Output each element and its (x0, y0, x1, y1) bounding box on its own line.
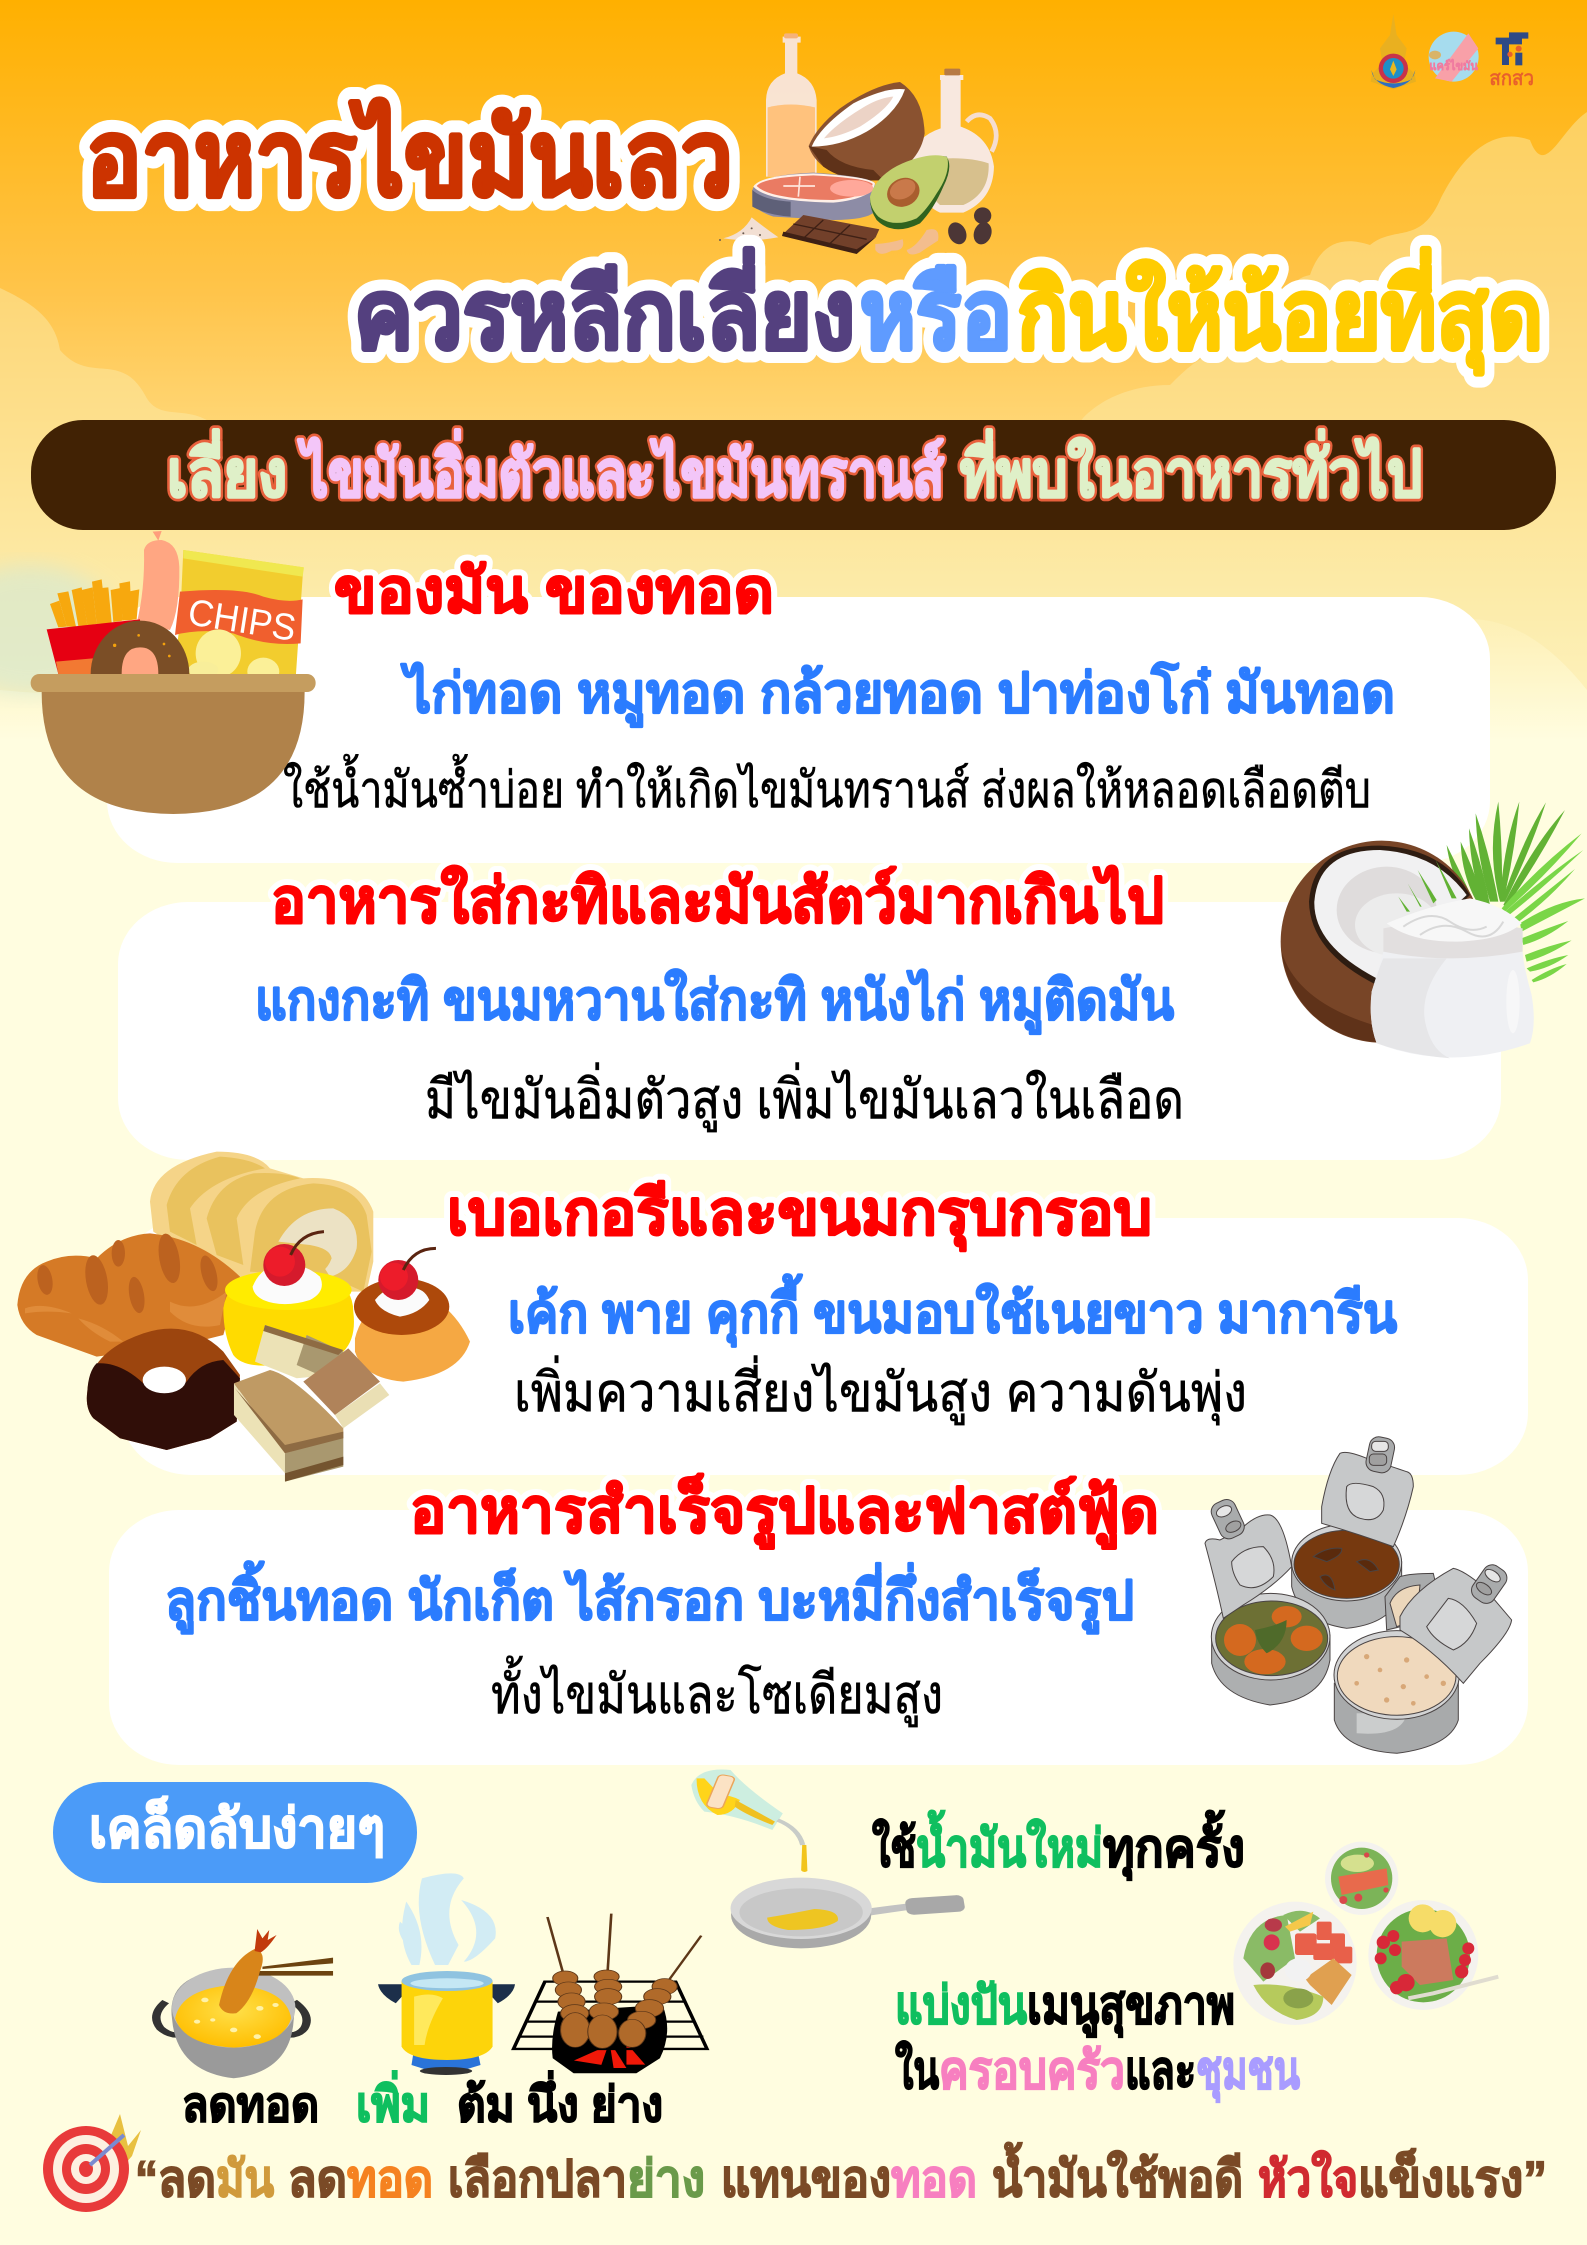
icon: target (43, 2114, 141, 2212)
text: share healthy menus: แบ่งปัน (895, 1977, 1027, 2035)
examples: แกงกะทิ ขนมหวานใส่กะทิ หนังไก่ หมูติดมัน (255, 968, 1174, 1035)
heading: เบอเกอรีและขนมกรุบกรอบ (447, 1179, 1152, 1251)
examples: เค้ก พาย คุกกี้ ขนมอบใช้เนยขาว มาการีน (508, 1274, 1397, 1348)
illustration: fatty foods (719, 33, 996, 254)
logos (1371, 14, 1534, 90)
slogan: แข็งแรง” (1358, 2148, 1547, 2207)
reason: เพิ่มความเสี่ยงไขมันสูง ความดันพุ่ง (514, 1355, 1247, 1426)
logo: circle: แคร์ไขมัน (1429, 58, 1479, 73)
reason: ใช้น้ำมันซ้ำบ่อย ทำให้เกิดไขมันทรานส์ ส่งผลให้หลอดเลือดตีบ (283, 754, 1371, 818)
healthy tip text (872, 1810, 1245, 1881)
slogan: น้ำมันใช้พอดี (992, 2142, 1243, 2207)
logo: emblem (1371, 14, 1416, 89)
title: หรือ (860, 262, 1012, 369)
slogan (135, 2142, 1547, 2207)
icon: boiling pot (378, 1873, 515, 2075)
heading: อาหารใส่กะทิและมันสัตว์มากเกินไป (271, 865, 1164, 936)
banner: ไขมันอิ่มตัวและไขมันทรานส์ (297, 429, 944, 510)
illustration: coconut and cream jar (1281, 802, 1585, 1058)
healthy tip text: ใช้ (872, 1818, 916, 1878)
tips badge (53, 1782, 417, 1883)
icon: oil pouring into pan (691, 1769, 966, 1948)
logo: circle (1429, 32, 1479, 82)
title: อาหารไขมันเลว (86, 98, 733, 218)
heading: เบอเกอรีและขนมกรุบกรอบ (447, 1179, 1152, 1251)
text: share healthy menus: ครอบครัว (939, 2042, 1125, 2100)
illustration: bakery (17, 1152, 470, 1482)
title (86, 98, 1543, 375)
reason: มีไขมันอิ่มตัวสูง เพิ่มไขมันเลวในเลือด (425, 1062, 1184, 1132)
slogan: เลือกปลา (448, 2151, 627, 2207)
panel: bakery and crunchy snacks (121, 1179, 1528, 1475)
panel: ready meals and fast food (109, 1473, 1528, 1765)
title: อาหารไขมันเลว (86, 98, 733, 218)
text: share healthy menus: เมนูสุขภาพ (1027, 1977, 1235, 2038)
logo: TSRI (1489, 32, 1534, 90)
slogan: หัวใจ (1258, 2150, 1358, 2207)
examples: ลูกชิ้นทอด นักเก็ต ไส้กรอก บะหมี่กึ่งสำเร็จรูป (165, 1561, 1134, 1634)
slogan: แทนของ (721, 2151, 891, 2207)
illustration: salads (1233, 1842, 1498, 2025)
banner: ที่พบในอาหารทั่วไป (960, 429, 1422, 510)
logo: TSRI: สกสว (1489, 68, 1534, 90)
icon: grilled skewers (513, 1914, 707, 2073)
slogan: ทอด (347, 2151, 433, 2207)
heading: ของมัน ของทอด (334, 557, 774, 626)
tips badge: เคล็ดลับง่ายๆ (89, 1797, 385, 1859)
text: share healthy menus: ชุมชน (1196, 2042, 1300, 2103)
cooking method labels (182, 2070, 663, 2132)
slogan: ทอด (891, 2151, 977, 2207)
illustration: basket of fried snacks (31, 531, 316, 814)
cooking method labels: ต้ม นึ่ง ย่าง (457, 2070, 663, 2132)
title: ควรหลีกเลี่ยง (354, 247, 855, 369)
healthy tip text: ทุกครั้ง (1103, 1810, 1245, 1881)
banner: เลี่ยง (167, 429, 287, 510)
reason: ทั้งไขมันและโซเดียมสูง (491, 1656, 943, 1727)
heading: อาหารสำเร็จรูปและฟาสต์ฟู้ด (410, 1473, 1159, 1549)
heading: ของมัน ของทอด (334, 557, 774, 626)
heading: อาหารสำเร็จรูปและฟาสต์ฟู้ด (410, 1473, 1159, 1549)
text: share healthy menus: ใน (895, 2040, 939, 2100)
cooking method labels: เพิ่ม (356, 2070, 430, 2132)
examples: ไก่ทอด หมูทอด กล้วยทอด ปาท่องโก๋ มันทอด (400, 661, 1395, 728)
cooking method labels: ลดทอด (182, 2079, 319, 2132)
slogan: มัน (216, 2151, 274, 2207)
title: ควรหลีกเลี่ยง (354, 247, 855, 369)
slogan: ย่าง (627, 2151, 705, 2207)
banner: ไขมันอิ่มตัวและไขมันทรานส์ (297, 429, 944, 510)
slogan: ลด (288, 2151, 347, 2207)
banner (31, 420, 1556, 530)
banner: เลี่ยง (167, 429, 287, 510)
panel: oily fried food (107, 557, 1490, 863)
heading: อาหารใส่กะทิและมันสัตว์มากเกินไป (271, 865, 1164, 936)
slogan: “ลด (135, 2151, 216, 2207)
healthy tip text: น้ำมันใหม่ (916, 1810, 1103, 1878)
illustration: basket of fried snacks: CHIPS (185, 590, 299, 649)
title: หรือ (860, 262, 1012, 369)
illustration: canned food (1205, 1435, 1512, 1753)
banner: ที่พบในอาหารทั่วไป (960, 429, 1422, 510)
icon: frying shrimp in pot (156, 1929, 333, 2078)
text: share healthy menus: และ (1125, 2042, 1196, 2100)
panel: coconut milk and animal fat (118, 865, 1501, 1160)
text: share healthy menus (895, 1977, 1300, 2103)
